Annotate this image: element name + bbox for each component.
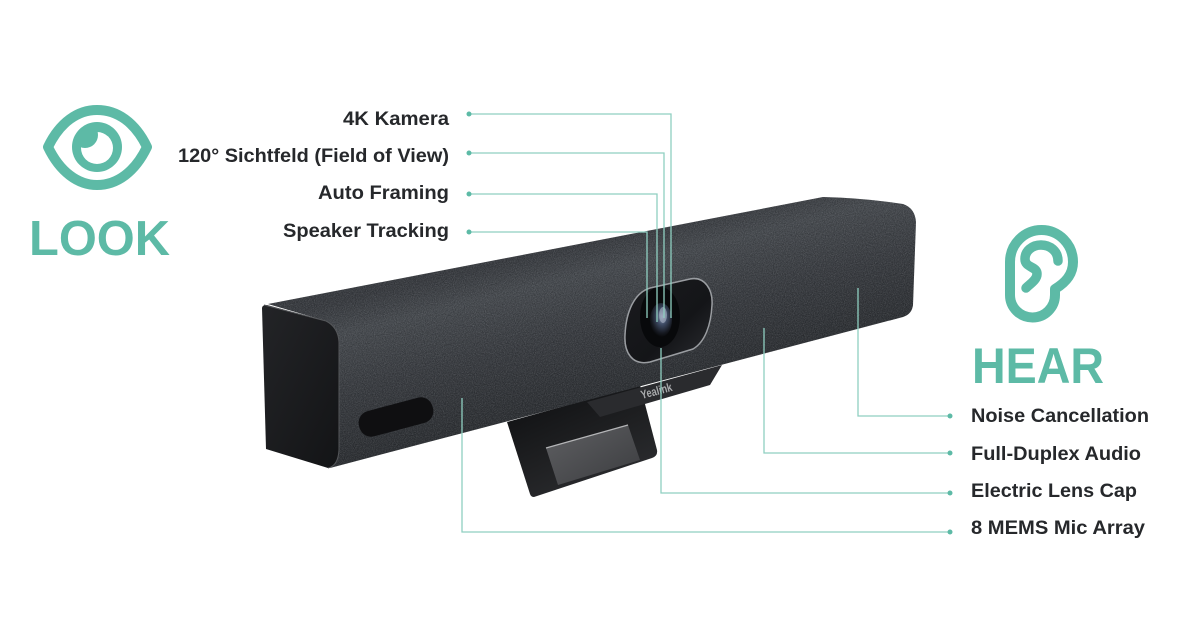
heading: HEAR: HEAR: [972, 338, 1104, 394]
leader lines: look features: [466, 112, 671, 322]
side sensor window: [356, 395, 436, 439]
hear feature labels: [971, 406, 1149, 539]
hear feature labels: Full-Duplex Audio: [971, 444, 1141, 465]
look feature labels: Auto Framing: [318, 183, 449, 204]
product: video bar: [262, 197, 916, 497]
look feature labels: 120° Sichtfeld (Field of View): [178, 146, 449, 167]
icon: eye: [48, 110, 147, 185]
logo plate with Yealink wordmark: [587, 365, 722, 417]
camera housing and lens: [625, 279, 712, 363]
look feature labels: Speaker Tracking: [283, 221, 449, 242]
left end cap: [262, 305, 339, 468]
look feature labels: [178, 109, 449, 242]
logo plate with Yealink wordmark: Yealink: [639, 380, 674, 402]
camera foot stand: [507, 385, 657, 497]
leader lines: hear features: [462, 288, 952, 534]
look feature labels: 4K Kamera: [343, 109, 449, 130]
hear feature labels: 8 MEMS Mic Array: [971, 518, 1145, 539]
infographic canvas: [32, 105, 1148, 538]
hear feature labels: Noise Cancellation: [971, 406, 1149, 427]
hear feature labels: Electric Lens Cap: [971, 481, 1137, 502]
fabric body: [268, 197, 916, 468]
icon: ear: [1010, 230, 1073, 318]
heading: LOOK: LOOK: [29, 212, 170, 266]
